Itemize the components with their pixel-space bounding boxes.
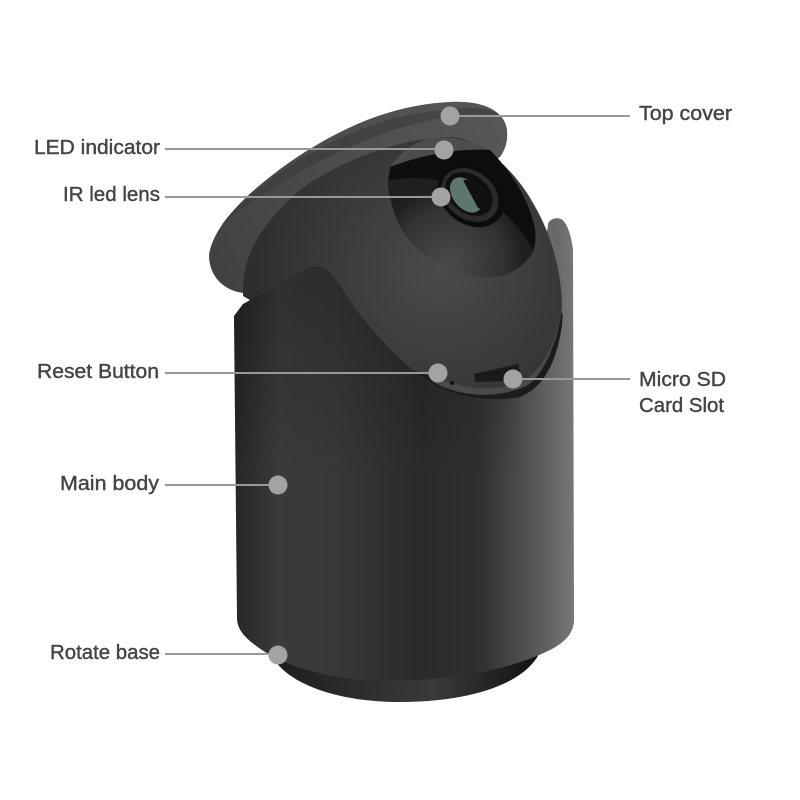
- body top shading: [234, 266, 520, 480]
- camera illustration: [209, 102, 574, 702]
- label: Rotate base: Rotate base: [50, 642, 160, 664]
- camera lens: [425, 152, 517, 240]
- marker dots: [268, 106, 522, 664]
- label: LED indicator: LED indicator: [34, 137, 160, 159]
- lens recess: [388, 137, 536, 277]
- rear side support: [520, 218, 573, 400]
- label: Micro SD Card Slot: Card Slot: [639, 395, 724, 417]
- top cover disc: [209, 102, 507, 293]
- leader lines: [165, 116, 630, 654]
- gap behind head: [370, 300, 572, 410]
- dome lower rim: [433, 315, 560, 395]
- rotate base ring: [272, 652, 540, 702]
- dome head: [243, 137, 562, 388]
- label: Micro SD Card Slot: Micro SD: [639, 369, 726, 391]
- label: Top cover: Top cover: [639, 103, 732, 125]
- label: Main body: Main body: [60, 473, 159, 495]
- main body: [234, 218, 574, 681]
- label: Reset Button: Reset Button: [37, 361, 159, 383]
- label: IR led lens: IR led lens: [63, 184, 160, 206]
- micro SD slot: [474, 364, 520, 382]
- reset pinhole: [450, 381, 454, 385]
- label: Micro SD Card Slot: [639, 369, 726, 417]
